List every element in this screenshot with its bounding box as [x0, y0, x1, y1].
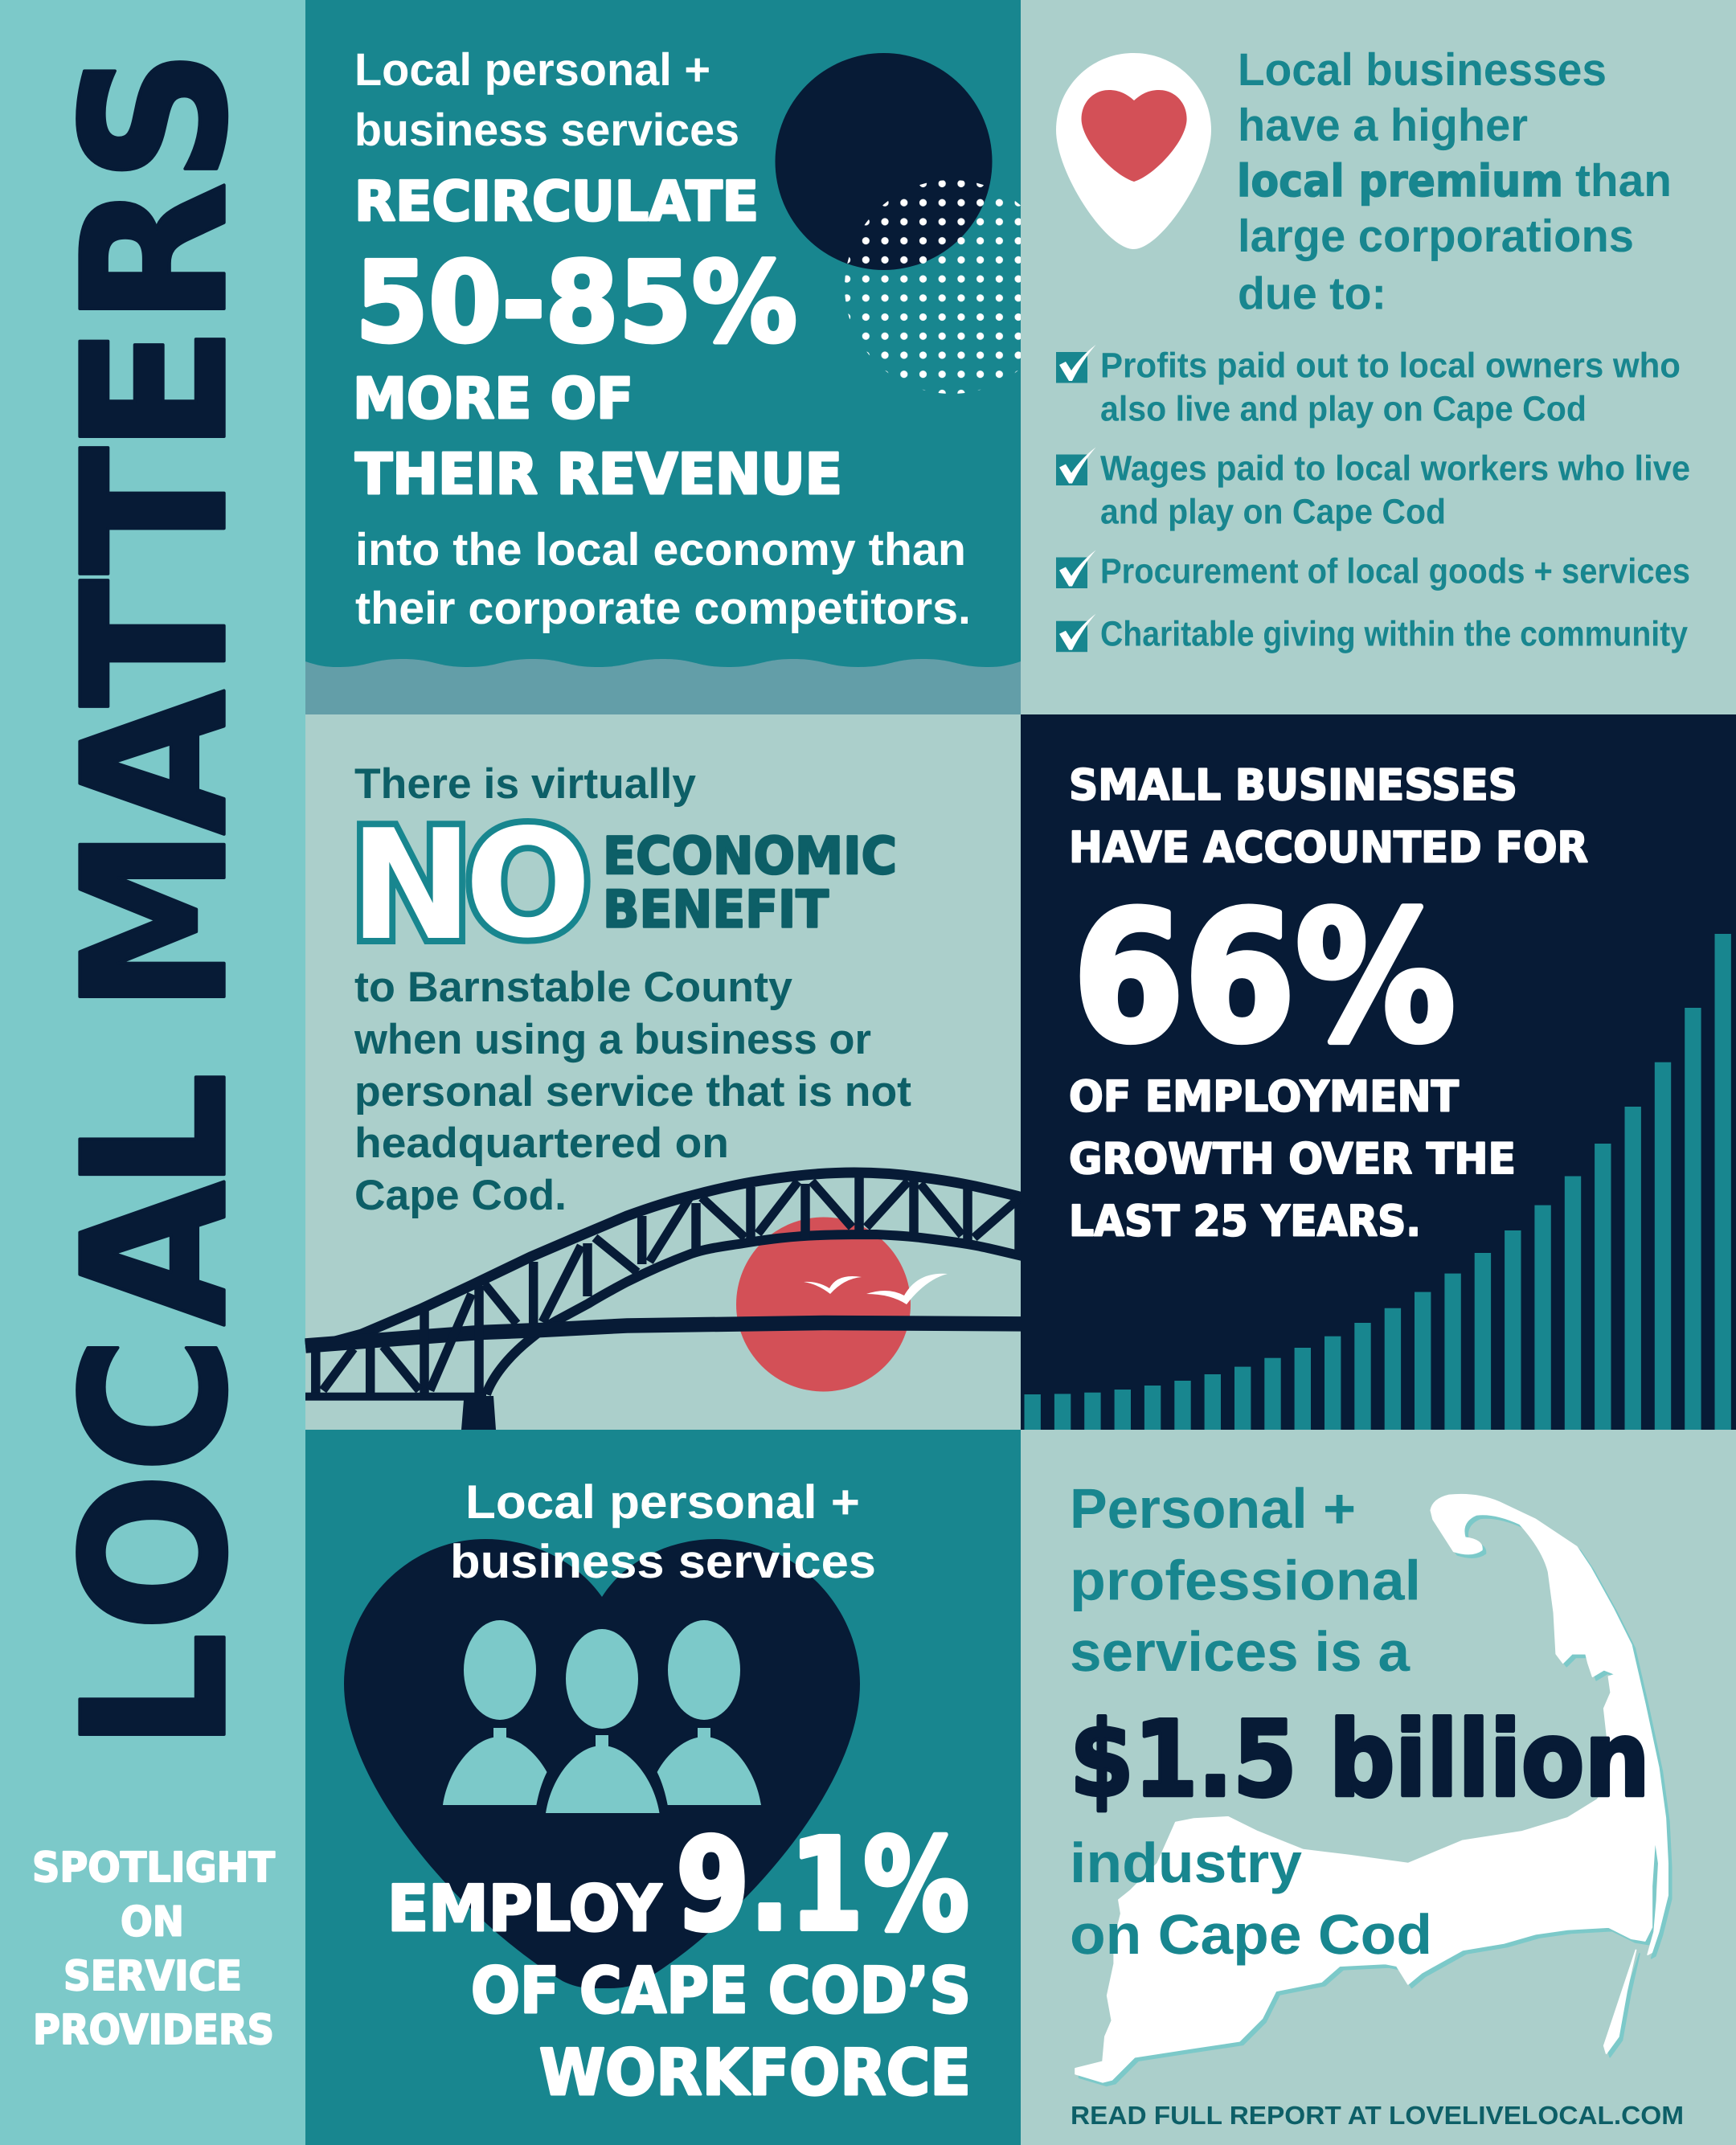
text: local personal + business services: business services [354, 104, 739, 156]
stat: 50-85%: 50-85% [355, 238, 797, 367]
item: procurement: Procurement of local goods + services [1100, 551, 1690, 592]
text: local personal + business services: Local personal + [465, 1476, 860, 1529]
text: of employment growth: OF EMPLOYMENT [1069, 1073, 1459, 1122]
text: industry on cape cod: on Cape Cod [1070, 1903, 1432, 1966]
item: wages [1100, 448, 1690, 532]
panel: local premium [1021, 0, 1736, 714]
text: more of their revenue [353, 366, 842, 507]
heading: local businesses: due to: [1238, 268, 1386, 320]
checkbox 3 [1056, 550, 1096, 588]
text: economic benefit: BENEFIT [603, 881, 829, 940]
heading: local businesses [1237, 44, 1672, 320]
item: profits [1100, 346, 1681, 429]
text: local personal + business services [450, 1476, 876, 1588]
checkbox 2 [1056, 447, 1096, 485]
item: wages: Wages paid to local workers who live [1100, 448, 1690, 489]
checkbox 4 [1056, 614, 1096, 652]
icon: sun [736, 1217, 911, 1392]
text: more of their revenue: THEIR REVENUE [355, 441, 842, 507]
text: more of their revenue: MORE OF [353, 366, 633, 432]
panel: 66 percent employment growth [1021, 714, 1736, 1430]
text: of employment growth: GROWTH OVER THE [1069, 1135, 1516, 1184]
text: to barnstable county: headquartered on [354, 1120, 729, 1167]
heading: local businesses: Local businesses [1238, 44, 1607, 96]
panel: employ workforce [305, 1430, 1021, 2145]
subtitle: spotlight on service providers: PROVIDERS [33, 2007, 274, 2054]
panel: recirculate revenue [305, 0, 1058, 714]
text: to barnstable county: Cape Cod. [354, 1172, 567, 1219]
subtitle: spotlight on service providers: ON [121, 1898, 184, 1946]
text: there is virtually: There is virtually [354, 760, 697, 808]
text: small businesses: HAVE ACCOUNTED FOR [1069, 824, 1588, 873]
dotted circle [845, 180, 1021, 394]
icon: heart [344, 1539, 860, 1988]
icon: map pin with heart [1056, 53, 1211, 249]
text: of employment growth [1069, 1073, 1516, 1246]
panel: title column [0, 0, 305, 2145]
heading: local businesses: have a higher [1238, 100, 1528, 151]
heading: local businesses: large corporations [1238, 211, 1634, 262]
map: cape cod [1075, 1495, 1672, 2086]
heading: local businesses: than [1575, 155, 1672, 207]
text: no: N [350, 797, 473, 974]
bar chart [1024, 934, 1731, 1430]
navy circle [775, 53, 992, 270]
subtitle: spotlight on service providers: SERVICE [63, 1953, 242, 2000]
text: personal + professional services: services is a [1070, 1620, 1410, 1683]
stat: 9.1%: 9.1% [676, 1811, 969, 1959]
text: of cape cod's workforce: WORKFORCE [539, 2036, 971, 2110]
text: personal + professional services [1070, 1477, 1421, 1683]
item: wages: and play on Cape Cod [1100, 492, 1446, 532]
title: local matters: LOCAL MATTERS [42, 48, 272, 1752]
text: local personal + business services: Local personal + [354, 44, 710, 96]
text: read full report: READ FULL REPORT AT LOVELIVELOCAL.COM [1071, 2101, 1684, 2130]
text: to barnstable county: to Barnstable County [354, 964, 793, 1011]
text: small businesses: SMALL BUSINESSES [1069, 761, 1517, 810]
text: recirculate: RECIRCULATE [354, 170, 759, 234]
subtitle: spotlight on service providers: SPOTLIGHT [32, 1844, 275, 1892]
text: local personal + business services [354, 44, 739, 156]
stat: $1.5 billion: $1.5 billion [1070, 1698, 1650, 1820]
text: no [350, 796, 592, 974]
text: personal + professional services: professional [1070, 1549, 1421, 1612]
icon: seagulls [804, 1274, 948, 1304]
text: employ: EMPLOY [387, 1872, 662, 1946]
icon: bridge [305, 1173, 1022, 1430]
text: no: O [465, 796, 592, 971]
heading: local businesses: local premium [1237, 155, 1563, 207]
text: economic benefit [603, 827, 897, 940]
text: into the local economy: into the local economy than [355, 524, 966, 575]
item: profits: Profits paid out to local owners who [1100, 346, 1681, 386]
item: profits: also live and play on Cape Cod [1100, 389, 1587, 429]
text: into the local economy: their corporate competitors. [355, 583, 971, 634]
stat: 66%: 66% [1073, 874, 1456, 1082]
panel: no economic benefit [305, 714, 1022, 1430]
text: industry on cape cod [1070, 1832, 1432, 1966]
list: reasons [1056, 345, 1690, 654]
text: to barnstable county: when using a business or [354, 1016, 871, 1063]
text: economic benefit: ECONOMIC [603, 827, 897, 886]
text: local personal + business services: business services [450, 1535, 876, 1588]
wave band [305, 659, 1021, 714]
text: of cape cod's workforce: OF CAPE COD’S [471, 1954, 971, 2028]
subtitle: spotlight on service providers [32, 1844, 275, 2054]
text: of cape cod's workforce [471, 1954, 971, 2110]
panel: 1.5 billion industry [1021, 1430, 1736, 2145]
icon: three people [443, 1620, 761, 1813]
text: small businesses [1069, 761, 1588, 873]
checkbox 1 [1056, 345, 1096, 383]
text: industry on cape cod: industry [1070, 1832, 1302, 1894]
text: into the local economy [355, 524, 971, 634]
text: of employment growth: LAST 25 YEARS. [1069, 1197, 1421, 1246]
text: personal + professional services: Personal + [1070, 1477, 1356, 1540]
text: to barnstable county: personal service that is not [354, 1068, 911, 1115]
text: to barnstable county [354, 964, 911, 1219]
